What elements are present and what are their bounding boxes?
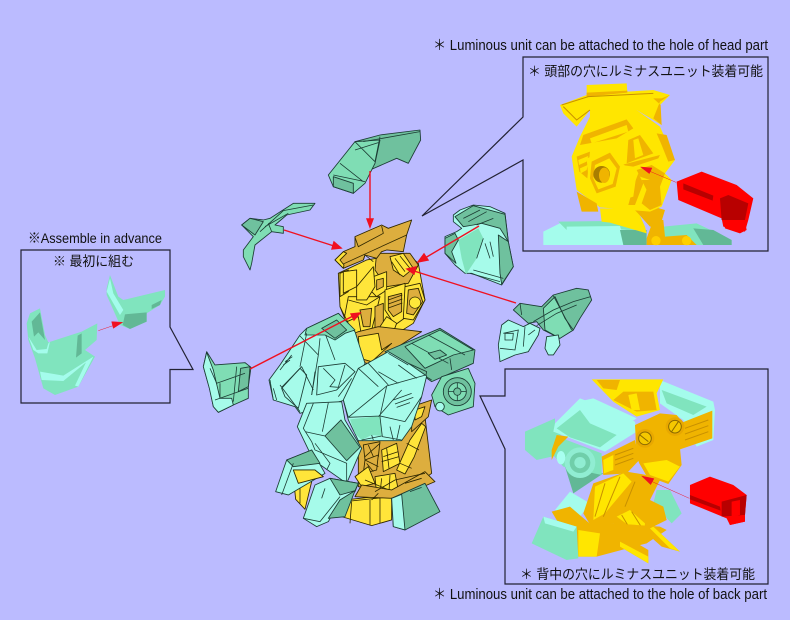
inset: parts assembled in advance [27,275,165,395]
left back arm [602,440,639,475]
heading: back part note in Japanese: ＊ 背中の穴にルミナスユニット装着可能 [520,566,755,582]
gold neck [335,327,422,365]
lower mechanism [498,320,540,362]
torso highlights [643,415,680,482]
exploded part: right head side piece [445,205,513,285]
right back arm [680,411,712,449]
lower body core [358,417,432,493]
gold base lines [372,473,425,500]
bolts [636,417,684,448]
hex plate with hole [587,148,637,205]
exploded part: top back panel [328,130,421,193]
arrow: left wing to crest [284,230,341,249]
right shoulder armor [660,380,715,447]
base ring front [342,494,392,526]
heading: assemble first in Japanese: ※ 最初に組む [53,254,134,269]
bust head [335,220,425,353]
exploded part: right dome piece [498,288,592,362]
exploded part: left wing piece [242,203,315,270]
neck [600,208,647,233]
arrow: unit to back hole [642,476,689,498]
center chest armor [338,352,427,441]
luminous unit [690,477,747,525]
neck shadow [633,207,665,227]
luminous unit [677,172,753,233]
small hook [545,335,560,355]
heading: assemble in advance: ※Assemble in advance [28,230,162,246]
head body [572,110,675,212]
arrow: top panel to crest [367,171,373,227]
arrow: parts join [98,322,123,331]
gold base top [355,472,435,498]
crest details [335,226,407,268]
head mechanical detail [340,253,425,350]
lower mechanism lines [500,327,535,350]
dome shell [513,288,592,338]
left chest armor [269,313,365,413]
left arm armor [297,402,362,483]
part: upper face guard [107,275,165,329]
right shoulder armor [385,328,475,382]
pipes [583,472,667,543]
base ring lines [300,480,392,525]
callout frame: assemble in advance [21,250,193,403]
back cross torso [635,413,683,484]
left shoulder armor [525,398,637,493]
shoulder disc [432,368,475,415]
lower body details [355,400,432,497]
neck yellow block [358,333,392,362]
mint base block [532,517,578,560]
head stub shading [597,380,657,412]
yellow base [552,507,680,563]
part: lower face guard [27,308,97,395]
yellow head stub [592,379,663,417]
exploded arrows [250,171,516,369]
base ring left [293,477,312,509]
base block right [392,483,440,530]
dome shading [543,297,573,338]
exploded part: lower left face guard [203,352,251,412]
arrow: unit to head hole [641,167,676,182]
arrow: face guard to face [250,313,360,369]
inset: head part with luminous unit [543,83,753,245]
arrow: right side piece to head [418,226,479,262]
arrow: dome piece to head [407,267,516,303]
head face [338,253,425,353]
base block center [303,478,358,527]
base of torso behind head [543,220,732,245]
bust body [269,313,475,530]
crest shading [562,91,670,125]
base mint side blocks [555,490,682,523]
neck slats [337,335,360,358]
head crest [560,83,670,127]
callout frame: head part [422,57,768,251]
heading: head part note in Japanese: ＊ 頭部の穴にルミナスユニット装着可能 [528,63,763,79]
base block left [276,450,325,495]
gold head crest [335,220,412,268]
shoulder disc [552,435,595,478]
heading: back part note in English: ＊ Luminous unit can be attached to the hole of back part [433,587,767,603]
inset: back part with luminous unit [525,379,747,563]
callout frame: back part [480,369,768,584]
head shading [577,119,675,212]
